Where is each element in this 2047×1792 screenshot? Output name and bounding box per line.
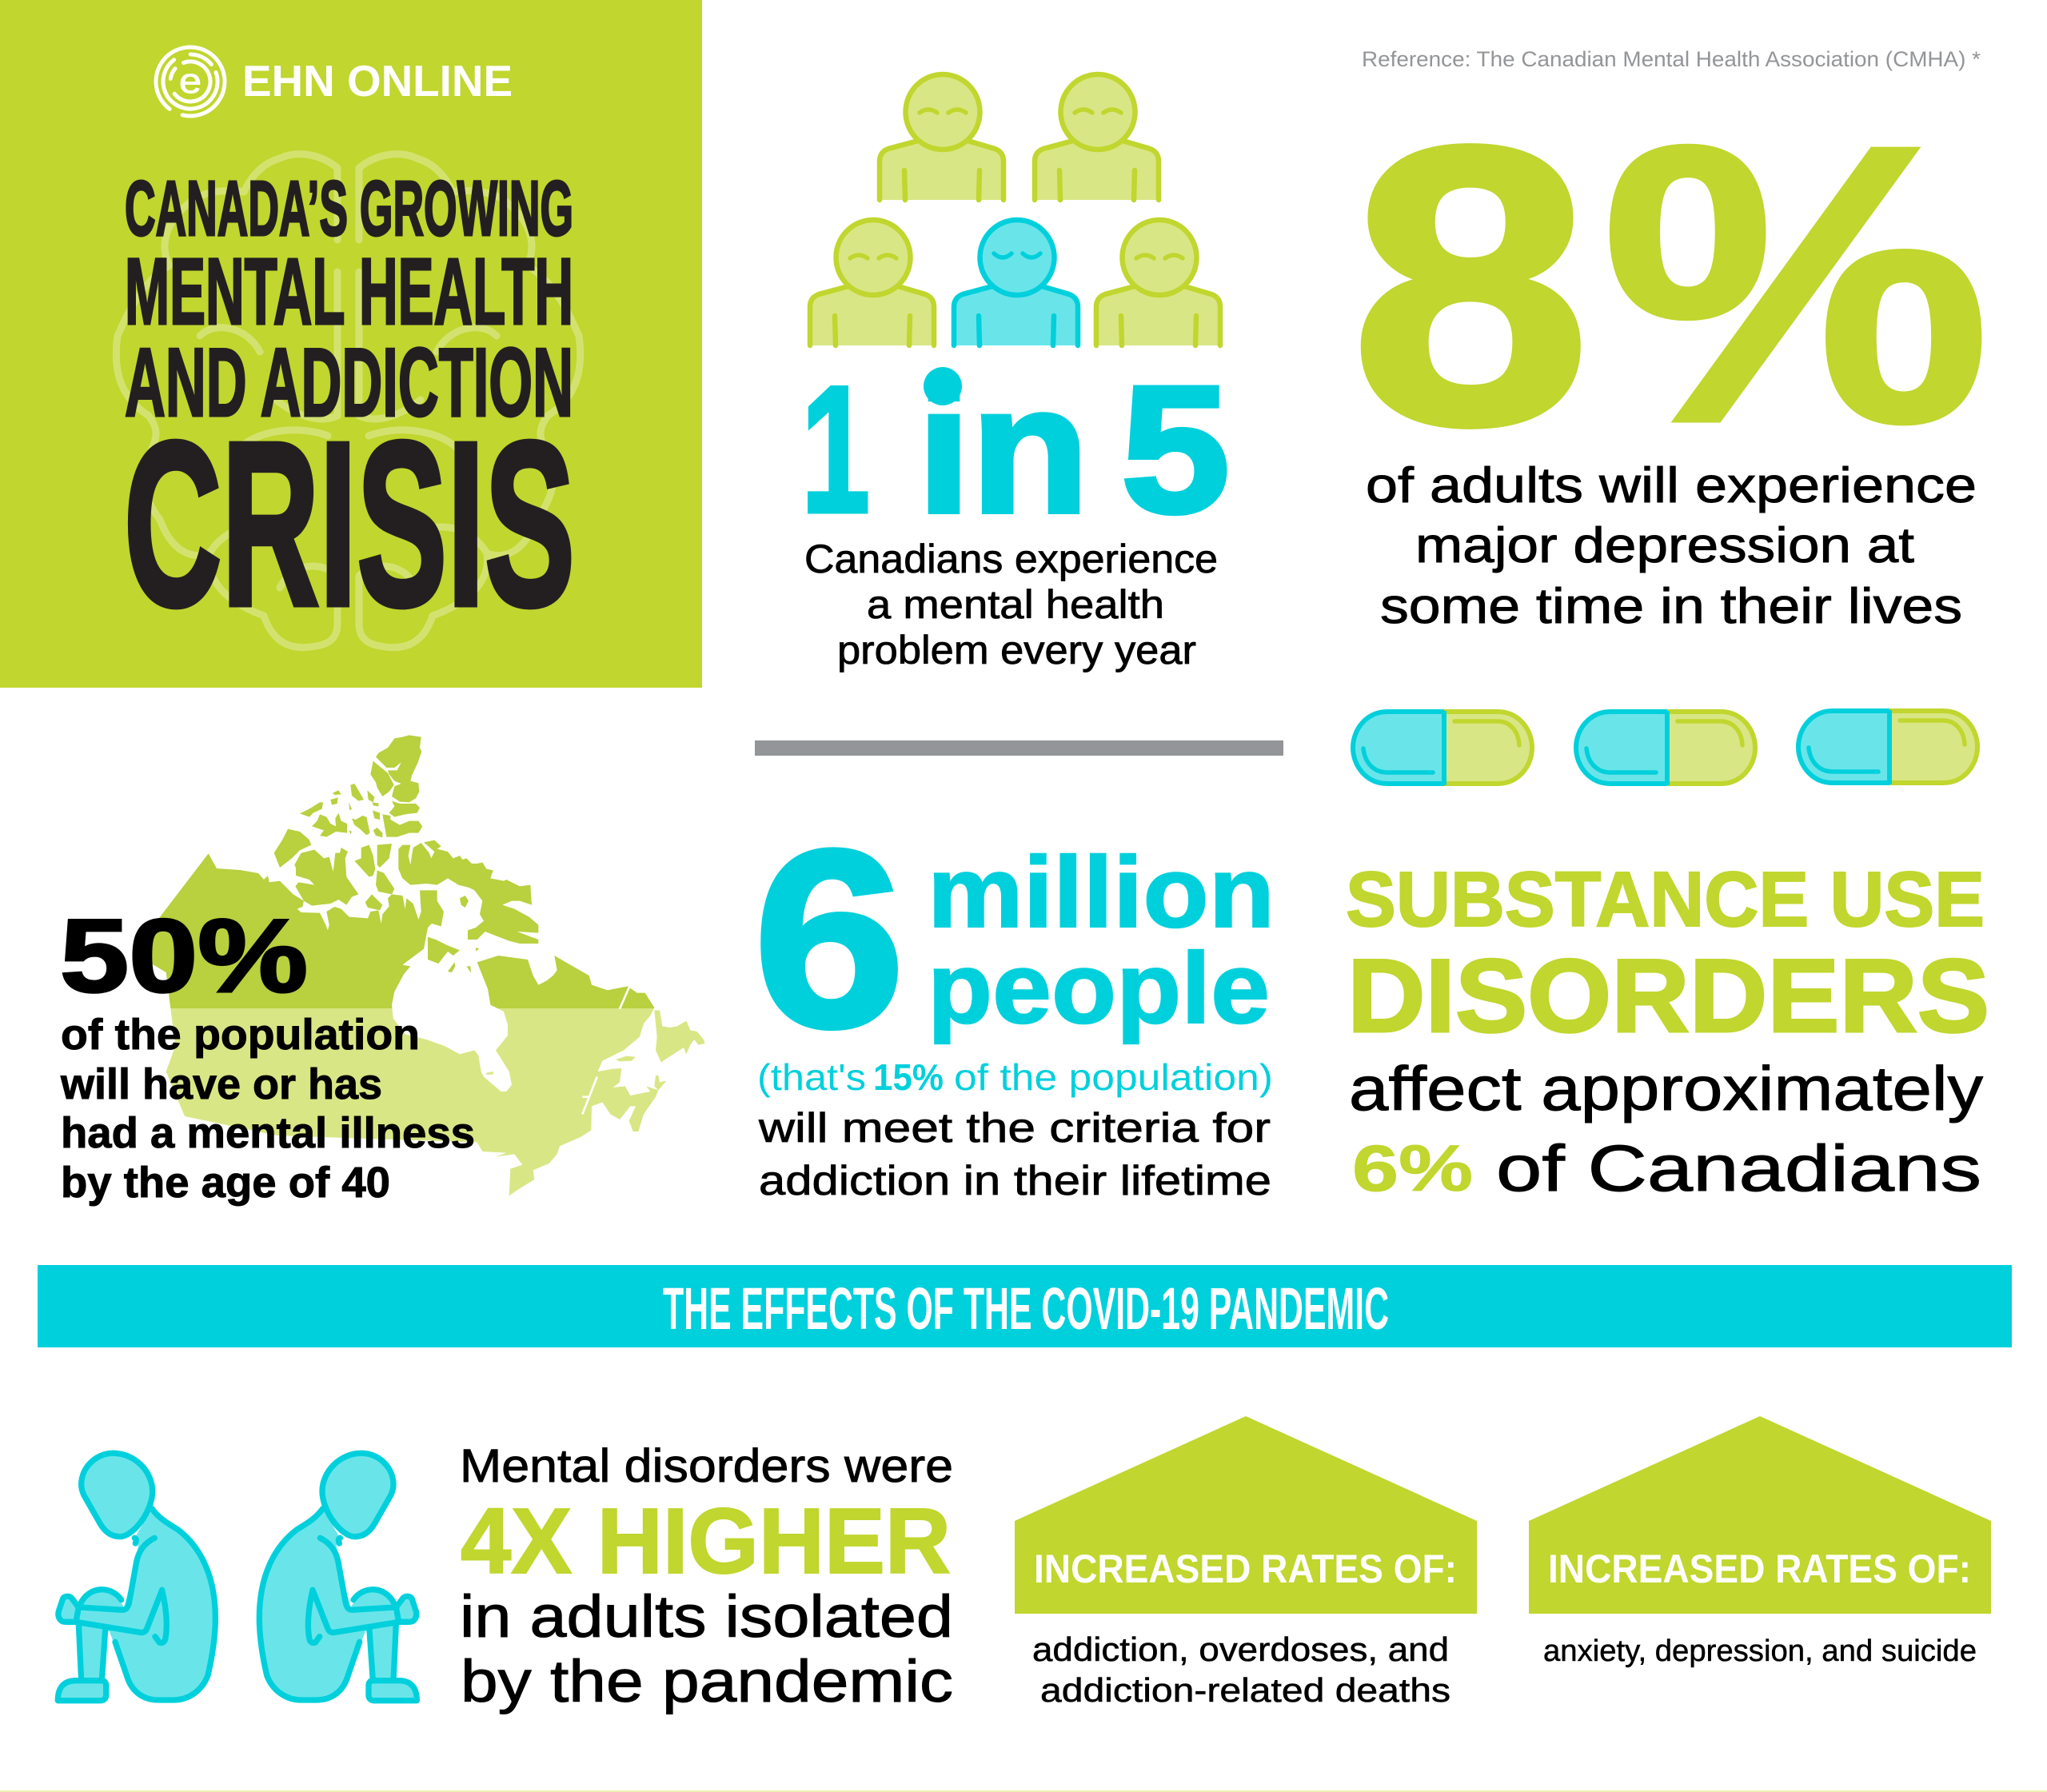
panel: increased rates of addiction [1015,1416,1477,1709]
reference note: Reference: The Canadian Mental Health Association (CMHA) * [1362,47,1981,71]
stat: substance use disorders: DISORDERS [1347,937,1989,1054]
icon group: five people, one highlighted [810,74,1220,345]
heading: Canada's growing mental health and addiction crisis: CRISIS [124,393,575,654]
panel: increased rates of anxiety [1529,1416,1991,1668]
stat: 50% of the population [60,897,475,1207]
stat: 50% of the population: 50% [60,897,308,1014]
banner: effects of the COVID-19 pandemic: THE EFFECTS OF THE COVID-19 PANDEMIC [663,1275,1389,1342]
banner: effects of the COVID-19 pandemic [38,1265,2012,1347]
stat: 50% of the population: had a mental illness [61,1109,475,1157]
panel: increased rates of anxiety: anxiety, depression, and suicide [1543,1634,1977,1668]
stat: 6 million people [753,797,1275,1204]
icons: three capsules [1353,710,1977,785]
stat: 1 in 5: 1 [801,348,870,550]
panel: increased rates of anxiety: INCREASED RATES OF: [1548,1547,1971,1591]
panel: increased rates of addiction: addiction, overdoses, and [1032,1630,1449,1668]
map detail: mainland [150,853,658,1199]
stat: 6 million people: of the population) [954,1056,1273,1098]
stat: 8%: some time in their lives [1380,579,1962,634]
stat: 6 million people: people [928,932,1270,1044]
stat: 6 million people: 6 [753,797,905,1080]
map detail: Newfoundland and Atlantic islands [486,1010,705,1090]
stat: 1 in 5: 5 [1121,348,1230,550]
heading: Canada's growing mental health and addiction crisis: MENTAL HEALTH [125,239,573,345]
stat: 4X higher: 4X HIGHER [461,1489,951,1593]
stat: 50% of the population: will have or has [60,1060,382,1108]
map detail: Arctic islands [274,735,479,973]
stat: 50% of the population: by the age of 40 [61,1159,390,1207]
stat: 4X higher: by the pandemic [461,1648,953,1714]
stat: 4X higher [460,1440,953,1714]
panel: increased rates of addiction: INCREASED RATES OF: [1034,1547,1457,1591]
stat: 6 million people: (that's [757,1056,866,1098]
map detail: Baffin Island [398,840,538,944]
divider [755,740,1283,756]
stat: substance use disorders: of Canadians [1496,1132,1981,1205]
icon: brain outline [116,154,581,648]
stat: 4X higher: Mental disorders were [460,1440,953,1492]
stat: 6 million people: million [928,836,1275,948]
stat: 6 million people: will meet the criteria for [758,1105,1271,1151]
heading: Canada's growing mental health and addiction crisis: AND ADDICTION [125,328,573,437]
stat: 8%: major depression at [1415,518,1914,573]
stat: substance use disorders: SUBSTANCE USE [1346,856,1985,943]
stat: 6 million people: 15% [873,1056,944,1098]
heading: Canada's growing mental health and addiction crisis: CANADA’S GROWING [125,165,573,252]
logo: EHN Online: e [179,62,202,101]
stat: 8%: % [1601,63,1991,505]
icon: two seated figures [58,1453,417,1701]
stat: 1 in 5: a mental health [867,582,1164,627]
stat: 4X higher: in adults isolated [460,1583,953,1650]
panel: title [0,0,702,688]
stat: substance use disorders: 6% [1352,1132,1473,1205]
stat: 6 million people: addiction in their lifetime [759,1158,1271,1204]
stat: substance use disorders: affect approximately [1349,1053,1983,1123]
stat: substance use disorders [1346,856,1989,1205]
stat: 1 in 5: in [917,348,1089,550]
heading: Canada's growing mental health and addiction crisis [124,165,575,654]
icon: highlighted teal person [954,220,1078,345]
stat: 8%: of adults will experience [1366,458,1977,513]
stat: 50% of the population: of the population [61,1011,420,1059]
stat: 8% [1351,63,1991,634]
stat: 1 in 5: Canadians experience [804,537,1218,581]
stat: 1 in 5 [801,348,1230,672]
stat: 8%: 8 [1351,65,1590,506]
panel: increased rates of addiction: addiction-related deaths [1040,1671,1450,1709]
logo: EHN Online [142,34,513,130]
stat: 1 in 5: problem every year [837,628,1196,672]
logo: EHN Online: EHN ONLINE [242,56,513,106]
map: Canada [150,735,705,1199]
